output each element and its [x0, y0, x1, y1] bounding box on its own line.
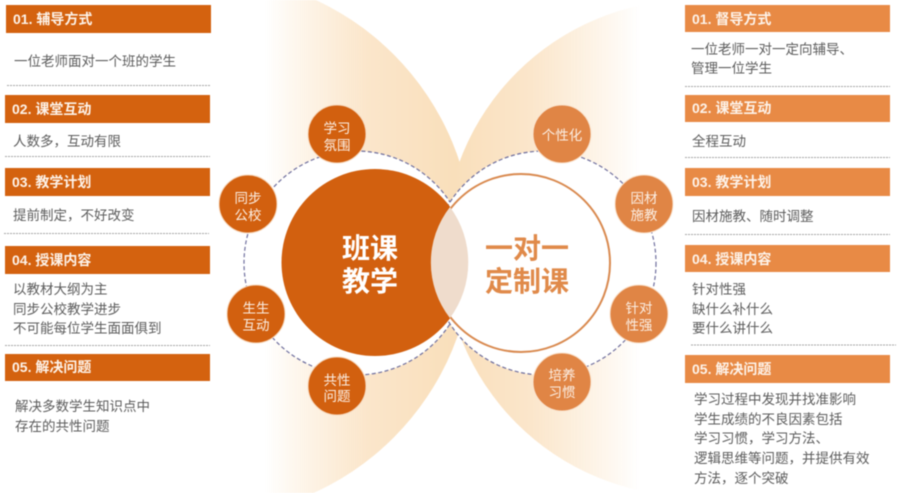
satellite: building habits: 习惯: [548, 384, 576, 400]
satellite: highly targeted: [610, 285, 668, 343]
right heading 05: 05. 解决问题: [692, 361, 771, 377]
main circle: class teaching: 班课: [342, 233, 398, 264]
satellite: synced with school: [219, 175, 277, 233]
left heading 02: 02. 课堂互动: [12, 101, 91, 117]
left heading 03: [5, 168, 210, 196]
main circle: one-on-one custom course: 定制课: [485, 266, 569, 297]
main circle: one-on-one custom course: 一对一: [485, 233, 569, 264]
main circle: class teaching: 教学: [342, 266, 398, 297]
left text 05: [15, 398, 150, 434]
left heading 05: 05. 解决问题: [12, 359, 91, 375]
right heading 01: 01. 督导方式: [692, 11, 771, 27]
right heading 02: 02. 课堂互动: [692, 100, 771, 116]
left heading 05: [5, 354, 210, 381]
dashed ring: left: [244, 151, 468, 375]
left heading 02: [5, 95, 210, 123]
background petal: right: [444, 0, 900, 493]
right heading 04: [685, 245, 890, 272]
right text 01: 一位老师一对一定向辅导、: [691, 42, 853, 57]
left text 04: 以教材大纲为主: [13, 282, 108, 297]
satellite: tailored teaching: 因材: [630, 191, 658, 206]
right heading 04: 04. 授课内容: [692, 251, 771, 267]
right text 01: 管理一位学生: [691, 61, 772, 76]
right text 02: 全程互动: [692, 133, 746, 149]
background petal: left: [202, 0, 473, 493]
right heading 03: 03. 教学计划: [692, 174, 771, 190]
right text 05: 方法，逐个突破: [694, 471, 788, 486]
right text 04: 针对性强: [692, 282, 746, 297]
satellite: common problems: 共性: [324, 373, 350, 388]
satellite: peer interaction: 生生: [242, 301, 270, 316]
panel: left column, class teaching: [4, 5, 211, 434]
left text 03: 提前制定，不好改变: [13, 207, 134, 223]
left text 02: 人数多，互动有限: [13, 133, 121, 149]
right satellite circles: [533, 105, 673, 411]
left text 04: 同步公校教学进步: [13, 301, 121, 317]
main circle: one-on-one custom course: [432, 174, 610, 352]
right heading 05: [685, 355, 890, 383]
satellite: common problems: 问题: [324, 389, 350, 404]
satellite: learning atmosphere: [308, 105, 366, 163]
satellite: synced with school: 同步: [234, 191, 262, 206]
right text 05: 学习过程中发现并找准影响: [694, 392, 856, 407]
satellite: peer interaction: 互动: [242, 318, 270, 333]
satellite: learning atmosphere: 氛围: [324, 138, 350, 153]
main circle: class teaching: [282, 169, 468, 356]
right text 01: [691, 42, 853, 76]
satellite: personalized: [533, 105, 591, 163]
left heading 01: [6, 5, 211, 33]
right text 04: 要什么讲什么: [692, 321, 773, 336]
satellite: peer interaction: [227, 285, 285, 343]
satellite: synced with school: 公校: [234, 207, 262, 223]
left satellite circles: [219, 105, 366, 415]
satellite: building habits: [533, 353, 591, 411]
left text 05: 解决多数学生知识点中: [15, 398, 150, 414]
right text 05: 学习习惯，学习方法、: [694, 430, 829, 446]
left text 01: 一位老师面对一个班的学生: [14, 54, 176, 69]
satellite: building habits: 培养: [548, 368, 576, 383]
satellite: highly targeted: 性强: [626, 318, 653, 333]
satellite: highly targeted: 针对: [626, 301, 652, 316]
right text 04: [692, 282, 773, 336]
right text 05: 学生成绩的不良因素包括: [694, 412, 842, 427]
right text 04: 缺什么补什么: [692, 302, 773, 317]
overlap lens: [431, 207, 468, 318]
right text 05: 逻辑思维等问题，并提供有效: [694, 450, 870, 466]
panel: right column, one-on-one course: [685, 5, 896, 486]
right heading 02: [685, 95, 890, 122]
right heading 01: [685, 5, 890, 32]
satellite: learning atmosphere: 学习: [324, 121, 350, 136]
right text 03: 因材施教、随时调整: [692, 209, 814, 224]
left text 05: 存在的共性问题: [15, 419, 110, 434]
right text 05: [694, 392, 870, 486]
satellite: common problems: [308, 357, 366, 415]
left text 04: [13, 282, 162, 336]
satellite: tailored teaching: [615, 175, 673, 233]
dashed ring: right: [432, 151, 656, 375]
left heading 03: 03. 教学计划: [12, 174, 91, 190]
satellite: tailored teaching: 施教: [630, 208, 658, 223]
right heading 03: [685, 168, 890, 196]
left heading 04: 04. 授课内容: [12, 252, 91, 268]
left text 04: 不可能每位学生面面俱到: [13, 321, 162, 336]
left heading 04: [5, 246, 210, 274]
satellite: personalized: 个性化: [542, 128, 582, 143]
left heading 01: 01. 辅导方式: [13, 11, 92, 27]
